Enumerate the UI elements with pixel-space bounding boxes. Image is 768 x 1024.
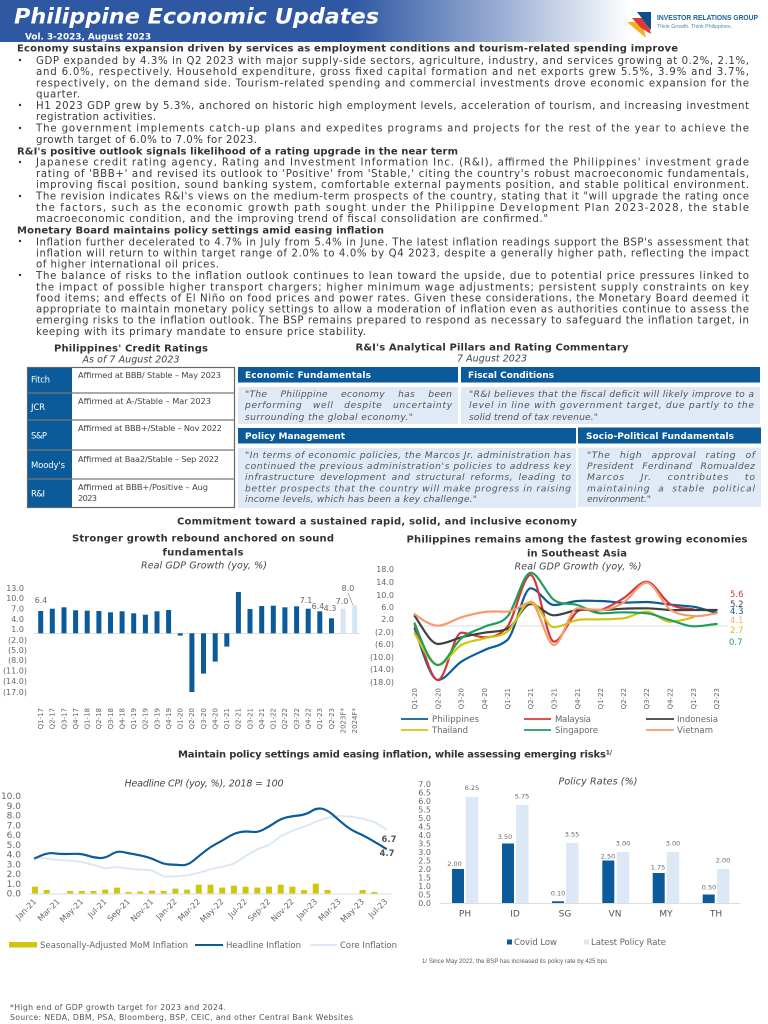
x axis labels: Jan-22 [154,897,179,922]
x axis labels: Q4-22 [304,708,312,729]
y axis labels [418,780,431,908]
end value labels: 0.7 [729,638,743,648]
bullets: GDP [19,56,749,146]
y axis labels: 7.0 [7,822,21,832]
data labels: 3.00 [666,840,680,848]
y axis labels: 9.0 [7,802,21,812]
y axis labels: 2.0 [381,615,394,624]
y axis labels: (2.0) [8,636,27,645]
legend: Singapore [555,726,598,736]
y axis labels: 18.0 [376,565,394,574]
x axis labels: Q4-20 [481,688,489,709]
x axis labels: Q4-22 [666,688,674,709]
y axis labels: 7.0 [11,604,24,614]
bullets: inflation: appropriate to maintain monetary policy settings to allow a moderation of inflation even as authorities continue to assess the [36,304,749,316]
legend [401,715,718,736]
x axis labels: Q2-21 [527,688,535,709]
x axis labels: Q1-18 [84,708,92,729]
x axis labels: Q1-17 [37,708,45,729]
x axis labels: Q1-20 [177,708,185,729]
chart heading: fundamentals [162,548,244,558]
y axis labels: 4.0 [7,850,21,860]
data labels: 1.75 [651,864,665,872]
legend: Philippines [432,715,480,725]
data labels: 0.10 [551,890,565,898]
x axis labels: Q2-17 [49,708,57,729]
x axis labels: Q4-18 [118,708,126,729]
data labels [35,584,354,613]
ratings rows: Moody's [31,461,66,471]
y axis labels: 4.5 [418,822,431,832]
y axis labels [3,584,27,697]
legend: Malaysia [555,715,591,725]
x axis labels: Q3-21 [550,688,558,709]
data labels: 2.00 [447,860,462,868]
pillar: economic fundamentals: "The Philippine economy has been [245,389,452,400]
chart: real GDP growth bars [3,534,360,733]
x axis labels: Q3-19 [153,708,161,729]
pillar: socio-political fundamentals: Marcos Jr. contributes to [587,472,755,483]
end value labels: 5.6 [730,590,744,600]
x axis labels: Q1-22 [270,708,278,729]
pillar: fiscal conditions: solid trend of tax revenue." [469,412,598,423]
data labels: 5.75 [515,792,529,800]
legend: Latest Policy Rate [591,938,666,948]
x axis labels: Q2-23 [328,708,336,729]
bullets: GDP: H1 2023 GDP grew by 5.3%, anchored on historic high employment levels, acceleration of tourism, and increasing investment [36,101,749,112]
legend: Core Inflation [340,941,397,951]
x axis labels: Jul-21 [85,897,109,920]
legend: Vietnam [677,726,713,736]
x axis labels: Q4-19 [165,708,173,729]
x axis labels: Q3-18 [107,708,115,729]
chart heading: in Southeast Asia [527,548,627,560]
chart: policy rates [418,776,740,965]
bullets: GDP: growth target of 6.0% to 7.0% for 2023. [36,135,257,146]
footnote: 1/ Since May 2022, the BSP has increased its policy rate by 425 bps [422,959,607,965]
data labels: 3.00 [616,840,630,848]
x axis labels: Q2-21 [235,708,243,729]
y axis labels: 5.5 [418,806,431,814]
x axis labels: Q3-20 [458,688,466,709]
x axis labels: Q3-21 [246,708,254,729]
table heading: Philippines' Credit Ratings [54,344,208,354]
data labels: 6.4 [35,596,47,605]
x axis labels: Q2-23 [713,688,721,709]
y axis labels: (18.0) [370,678,394,687]
x axis labels: Q3-20 [200,708,208,729]
y axis labels: (17.0) [3,688,27,697]
bullets: rating [19,158,749,225]
x axis labels: Q1-23 [690,688,698,709]
y axis labels: 1.5 [418,874,431,882]
y axis labels: 0.5 [418,890,431,900]
bullets: GDP: GDP expanded by 4.3% in Q2 2023 with major supply-side sectors, agriculture, industry, and services growing at 0.2%, 2.1%, [36,56,749,67]
x axis labels: May-21 [58,897,85,924]
latest policy rate bars [466,797,730,903]
pillar: fiscal conditions [461,367,760,424]
x axis labels: Q1-21 [504,688,512,709]
bullets: inflation: The balance of risks to the inflation outlook continues to lean toward the upside, due to potential price pressures linked to [35,271,749,282]
panel: credit ratings table [28,344,235,508]
chart heading: Real GDP Growth (yoy, %) [141,560,267,572]
data labels: 8.0 [342,584,354,593]
heading: Economy sustains expansion driven by services as employment conditions and tourism-related spending improve [17,44,678,54]
y axis labels: 14.0 [376,578,394,587]
y axis labels [370,565,394,687]
source notes: *High end of GDP growth target for 2023 and 2024. [10,1003,226,1012]
legend [9,941,397,951]
ratings rows: Affirmed at Baa2/Stable – Sep 2022 [78,454,219,464]
pillar: socio-political fundamentals: maintaining a stable political [587,484,755,494]
pillar: fiscal conditions: "R&I believes that the fiscal deficit will likely improve to a [469,389,754,400]
chart title: Headline CPI (yoy, %), 2018 = 100 [124,778,284,790]
end value labels: 4.1 [730,616,744,626]
pillar: policy management: "In terms of economic policies, the Marcos Jr. administration has [245,450,571,461]
end value labels: 6.7 [381,835,397,845]
y axis labels: 1.0 [7,880,21,890]
x axis labels: Jul-22 [226,897,249,920]
data labels: 2.00 [716,856,730,864]
heading: R&I's positive outlook signals likelihood of a rating upgrade in the near term [17,146,458,158]
pillar: policy management: Policy Management [245,432,346,442]
x axis labels: Q2-19 [142,708,150,729]
y axis labels: 1.0 [11,625,24,634]
y axis labels [1,792,21,900]
x axis labels: Q2-20 [188,708,196,729]
x axis labels: Q1-20 [411,688,419,709]
x axis labels: Q2-22 [281,708,289,729]
bullets: GDP: The government implements catch-up plans and expedites programs and projects for the rest of the year to achieve the [35,124,749,134]
category labels: TH [709,910,722,920]
ratings rows: 2023 [78,493,97,503]
end value labels [379,835,397,859]
x axis labels: Jul-23 [366,897,389,920]
x axis labels: Q4-21 [574,688,582,709]
bullets: inflation: emerging risks to the inflation outlook. The BSP remains prepared to respond as necessary to safeguard the inflation target, in [36,316,749,326]
bullets: GDP: respectively, on the demand side. Tourism-related spending and commercial investments drove economic expansion for the [36,78,749,90]
pillar: policy management: income levels, which has been a key challenge." [245,494,477,505]
bars [38,592,357,692]
y axis labels: 10.0 [6,594,24,603]
date: 7 August 2023 [457,354,527,364]
category labels: SG [559,910,571,920]
ratings rows: Affirmed at BBB+/Positive – Aug [78,482,208,492]
category labels: PH [459,910,471,920]
y axis labels: (6.0) [375,640,394,649]
bullets: inflation: Inflation further decelerated to 4.7% in July from 5.4% in June. The latest inflation readings support the BSP's assessment that [36,238,749,248]
category labels: ID [510,910,520,920]
pillar: policy management: infrastructure development and structural reforms, leading to [245,472,571,483]
x axis labels: Sep-21 [106,897,132,923]
bullets: rating: macroeconomic condition, and the improving trend of fiscal consolidation are confirmed." [36,214,548,225]
x axis labels [411,688,721,709]
bullets: inflation: food items; and effects of El Niño on food prices and power rates. Given these considerations, the Monetary Board deemed it [36,294,749,304]
x axis labels: Q2-18 [95,708,103,729]
section: economy sustains expansion [17,44,749,146]
chart heading [406,534,748,572]
y axis labels: 7.0 [418,780,431,789]
x axis labels: Q3-22 [643,688,651,709]
data labels: 4.3 [324,604,336,613]
x axis labels: Q2-20 [434,688,442,709]
category labels: VN [609,910,621,920]
data labels: 0.50 [702,884,716,892]
y axis labels: 10.0 [1,792,21,802]
data labels: 7.0 [336,597,348,606]
y axis labels: (14.0) [370,665,394,674]
pillar: policy management: continued the previous administration's policies to address key [245,461,572,472]
x axis labels [13,897,389,924]
y axis labels: 2.5 [418,856,431,866]
y axis labels: (8.0) [8,656,27,665]
y axis labels: 3.0 [7,860,21,870]
section heading: policy settings: 1/ [606,750,613,756]
x axis labels: Q3-22 [293,708,301,729]
bullets: rating: Japanese credit rating agency, Rating and Investment Information Inc. (R&I), affirmed the Philippines' investment grade [35,158,749,168]
y axis labels: (5.0) [8,646,27,655]
header banner [0,0,768,42]
x axis labels: Q2-22 [620,688,628,709]
legend: Indonesia [677,715,718,725]
x axis labels: Nov-22 [269,897,296,924]
y axis labels: (2.0) [375,628,394,637]
legend [507,938,666,948]
data labels: 3.55 [565,830,579,838]
ratings rows: Fitch [31,376,50,386]
chart title: Policy Rates (%) [558,776,638,788]
pillar: fiscal conditions: level in line with government target, due partly to the [469,400,754,411]
y axis labels: 10.0 [376,591,394,600]
legend: Headline Inflation [226,941,301,951]
x axis labels: May-22 [198,897,226,924]
legend: Covid Low [514,938,557,948]
x axis labels: Q3-17 [60,708,68,729]
y axis labels: 6.5 [418,788,431,798]
x axis labels: Q4-21 [258,708,266,729]
x axis labels: Q1-22 [597,688,605,709]
bullets: inflation: the impact of possible higher transport chargers; higher minimum wage adjustments; persistent supply constraints on key [36,282,749,294]
chart: southeast asia GDP lines [370,534,748,736]
bullets: inflation: inflation will return to within target range of 2.0% to 4.0% by Q4 2023, despite a generally higher path, reflecting the impact [36,248,749,260]
x axis labels: Q4-17 [72,708,80,729]
legend: Seasonally-Adjusted MoM Inflation [40,941,188,951]
y axis labels: 3.5 [418,840,431,848]
ratings rows: Affirmed at A-/Stable – Mar 2023 [78,396,211,406]
chart heading: Stronger growth rebound anchored on sound [72,534,334,544]
ratings rows: S&P [31,432,47,442]
category labels [459,910,722,920]
pillar: socio-political fundamentals [578,428,761,507]
logo: Investor Relations Group: Think Growth. Think Philippines. [657,24,732,30]
section: monetary board [17,226,749,338]
chart heading: Philippines remains among the fastest growing economies [406,534,748,546]
x axis labels: Q1-21 [223,708,231,729]
panel: R&I analytical pillars [238,342,761,508]
data labels: 6.4 [312,602,324,611]
volume and date: Vol. 3-2023, August 2023 [25,32,151,42]
headline inflation line [35,808,386,865]
heading: R&I's Analytical Pillars and Rating Commentary [356,342,629,354]
x axis labels: Q1-23 [316,708,324,729]
data labels: 6.25 [465,784,479,792]
y axis labels: (14.0) [3,677,27,686]
bullets: rating: rating of 'BBB+' and revised its outlook to 'Positive' from 'Stable,' citing the country's robust macroeconomic fundamentals, [36,169,749,180]
x axis labels [37,708,359,733]
data labels: 7.1 [300,596,312,605]
section heading: commitment: Commitment toward a sustained rapid, solid, and inclusive economy [177,516,577,528]
end value labels: 5.2 [730,600,744,610]
pillar: economic fundamentals: surrounding the global economy." [245,412,413,423]
bullets: rating: The revision indicates R&I's views on the medium-term prospects of the country, stating that it "will upgrade the rating once [35,192,749,202]
pillar: economic fundamentals: Economic Fundamentals [245,371,371,381]
x axis labels: 2024F* [351,708,359,733]
end value labels: 4.7 [379,849,395,859]
y axis labels: (10.0) [370,653,394,662]
ratings rows: Affirmed at BBB/ Stable – May 2023 [78,370,221,380]
country lines [415,573,717,680]
x axis labels: Q1-19 [130,708,138,729]
pillar: policy management: better prospects that the country will make progress in raising [245,484,571,494]
y axis labels: 0.0 [418,899,431,908]
ratings rows: R&I [31,490,45,500]
bullets: rating: improving fiscal position, sound banking system, comfortable external payments position, and stable political environment. [36,180,749,191]
y axis labels: 4.0 [11,615,24,624]
category labels: MY [659,910,673,920]
y axis labels: 5.0 [418,814,431,823]
y axis labels: 6.0 [7,831,21,841]
pillar: socio-political fundamentals: environment." [587,494,651,505]
y axis labels: 2.0 [418,865,431,874]
y axis labels: 1.0 [418,882,431,891]
legend: Thailand [431,726,468,736]
y axis labels: 4.0 [418,831,431,840]
y axis labels: 3.0 [418,848,431,857]
bullets: inflation [19,238,749,338]
y axis labels: 13.0 [6,584,24,593]
x axis labels: 2023F* [339,708,347,733]
bullets: GDP: registration activities. [36,112,156,123]
y axis labels: 8.0 [7,812,21,822]
x axis labels: Mar-21 [36,897,62,923]
bullets: GDP: and 6.0%, respectively. Household expenditure, gross fixed capital formation and net exports grew 5.5%, 3.9% and 3.7%, [36,67,749,78]
x axis labels: Jan-21 [13,897,38,922]
y axis labels: 6.0 [418,797,431,806]
pillar: socio-political fundamentals: President Ferdinand Romualdez [587,461,755,472]
chart: headline CPI [1,778,397,951]
y axis labels: 5.0 [7,841,21,851]
data labels: 2.50 [601,852,615,860]
source notes: Source: NEDA, DBM, PSA, Bloomberg, BSP, CEIC, and other Central Bank Websites [10,1013,353,1022]
end value labels [729,590,744,648]
pillar: policy management [238,428,576,508]
logo: Investor Relations Group [627,12,758,38]
heading: Monetary Board maintains policy settings amid easing inflation [17,226,384,236]
x axis labels: Nov-21 [129,897,155,924]
x axis labels: Sep-22 [246,897,272,923]
ratings rows [28,368,235,508]
ratings rows: Affirmed at BBB+/Stable – Nov 2022 [78,423,222,433]
bullets: inflation: keeping with its primary mandate to ensure price stability. [36,327,366,338]
chart heading: Real GDP Growth (yoy, %) [514,562,642,572]
end value labels: 4.3 [730,607,744,617]
covid low bars [452,844,715,903]
y axis labels: 0.0 [7,890,21,900]
source notes [10,1003,353,1022]
x axis labels: Mar-22 [176,897,202,923]
pillar: socio-political fundamentals: Socio-Political Fundamentals [586,432,734,442]
pillar: socio-political fundamentals: "The high approval rating of [587,450,757,461]
ratings rows: JCR [30,403,45,413]
x axis labels: Mar-23 [317,897,343,923]
end value labels: 2.7 [730,626,744,636]
y axis labels: 2.0 [7,870,21,880]
title: Philippine Economic Updates [14,4,379,28]
bullets: inflation: of higher international oil prices. [36,260,219,270]
MoM bars [32,884,377,894]
bullets: GDP: quarter. [36,90,80,100]
pillar: fiscal conditions: Fiscal Conditions [468,371,554,381]
data labels [447,784,730,898]
pillar: economic fundamentals: performing well despite uncertainty [244,400,453,411]
table date: As of 7 August 2023 [82,354,180,366]
y axis labels: 6.0 [381,603,394,612]
x axis labels: Jan-23 [294,897,319,922]
bullets: rating: the factors, such as the economic growth path sought under the Philippine Development Plan 2023-2028, the stable [36,203,749,214]
chart heading [72,534,334,572]
logo: Investor Relations Group: INVESTOR RELATIONS GROUP [657,13,758,22]
x axis labels: May-23 [339,897,366,924]
x axis labels: Q4-20 [212,708,220,729]
section heading: policy settings: Maintain policy settings amid easing inflation, while assessing emerging risks [178,750,606,760]
data labels: 3.50 [498,833,512,841]
y axis labels: (11.0) [3,666,27,676]
pillar: economic fundamentals [238,367,458,424]
section: R&I outlook [17,146,749,225]
core inflation line [35,816,386,877]
